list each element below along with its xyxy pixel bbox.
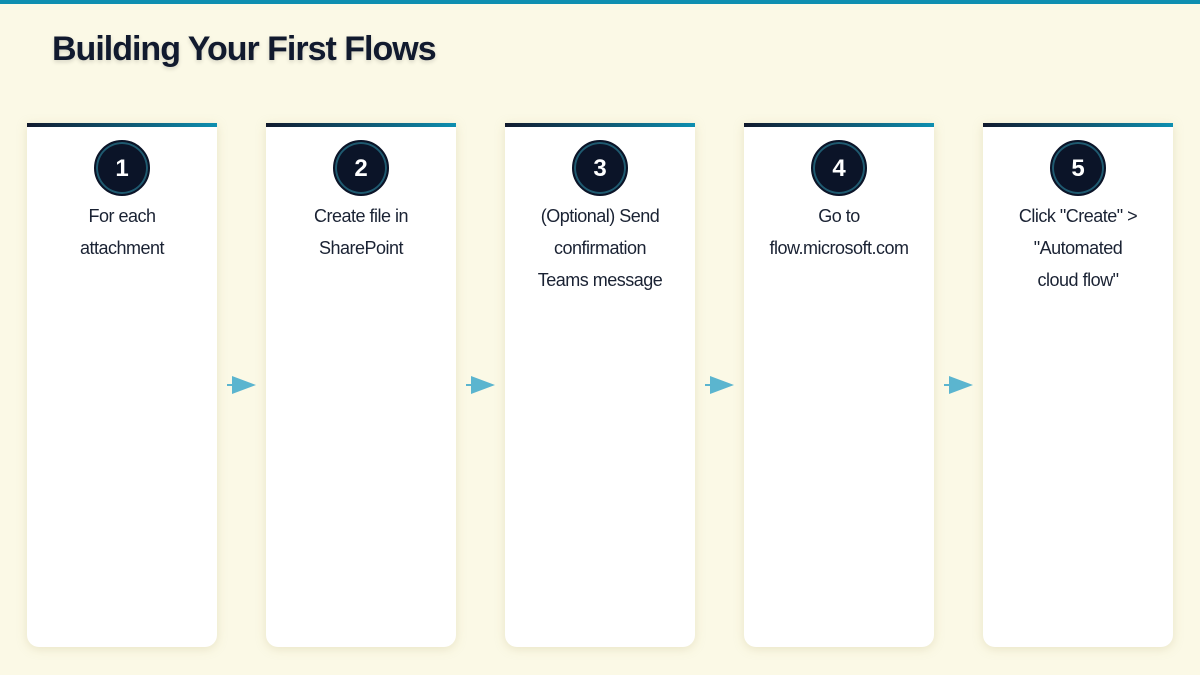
text 5 bbox=[1019, 206, 1137, 290]
badge 3: 3 bbox=[593, 155, 607, 182]
text 5: "Automated bbox=[1034, 238, 1122, 258]
text 3: Teams message bbox=[538, 270, 662, 290]
arrow 1 bbox=[227, 376, 256, 394]
card: step 3 bbox=[505, 123, 695, 647]
text 4 bbox=[769, 206, 909, 258]
title: Building Your First Flows bbox=[52, 30, 436, 68]
badge 4 bbox=[811, 140, 867, 196]
text 5: Click "Create" > bbox=[1019, 206, 1137, 226]
text 1: For each bbox=[88, 206, 156, 226]
text 2: Create file in bbox=[314, 206, 408, 226]
badge 1: 1 bbox=[115, 155, 129, 182]
text 1: attachment bbox=[80, 238, 164, 258]
text 4: Go to bbox=[818, 206, 860, 226]
arrow 2 bbox=[466, 376, 495, 394]
text 3: (Optional) Send bbox=[541, 206, 659, 226]
text 2: SharePoint bbox=[319, 238, 403, 258]
text 5: cloud flow" bbox=[1038, 270, 1118, 290]
badge 4: 4 bbox=[832, 155, 846, 182]
card: step 4 bbox=[744, 123, 934, 647]
badge 2 bbox=[333, 140, 389, 196]
text 1 bbox=[80, 206, 164, 258]
arrow 3 bbox=[705, 376, 734, 394]
badge 3 bbox=[572, 140, 628, 196]
badge 5: 5 bbox=[1071, 155, 1085, 182]
card: step 5 bbox=[983, 123, 1173, 647]
text 3 bbox=[538, 206, 662, 290]
card: step 1 bbox=[27, 123, 217, 647]
badge 5 bbox=[1050, 140, 1106, 196]
badge 2: 2 bbox=[354, 155, 368, 182]
text 2 bbox=[314, 206, 408, 258]
text 3: confirmation bbox=[554, 238, 646, 258]
badge 1 bbox=[94, 140, 150, 196]
arrow 4 bbox=[944, 376, 973, 394]
card: step 2 bbox=[266, 123, 456, 647]
text 4: flow.microsoft.com bbox=[769, 238, 909, 258]
